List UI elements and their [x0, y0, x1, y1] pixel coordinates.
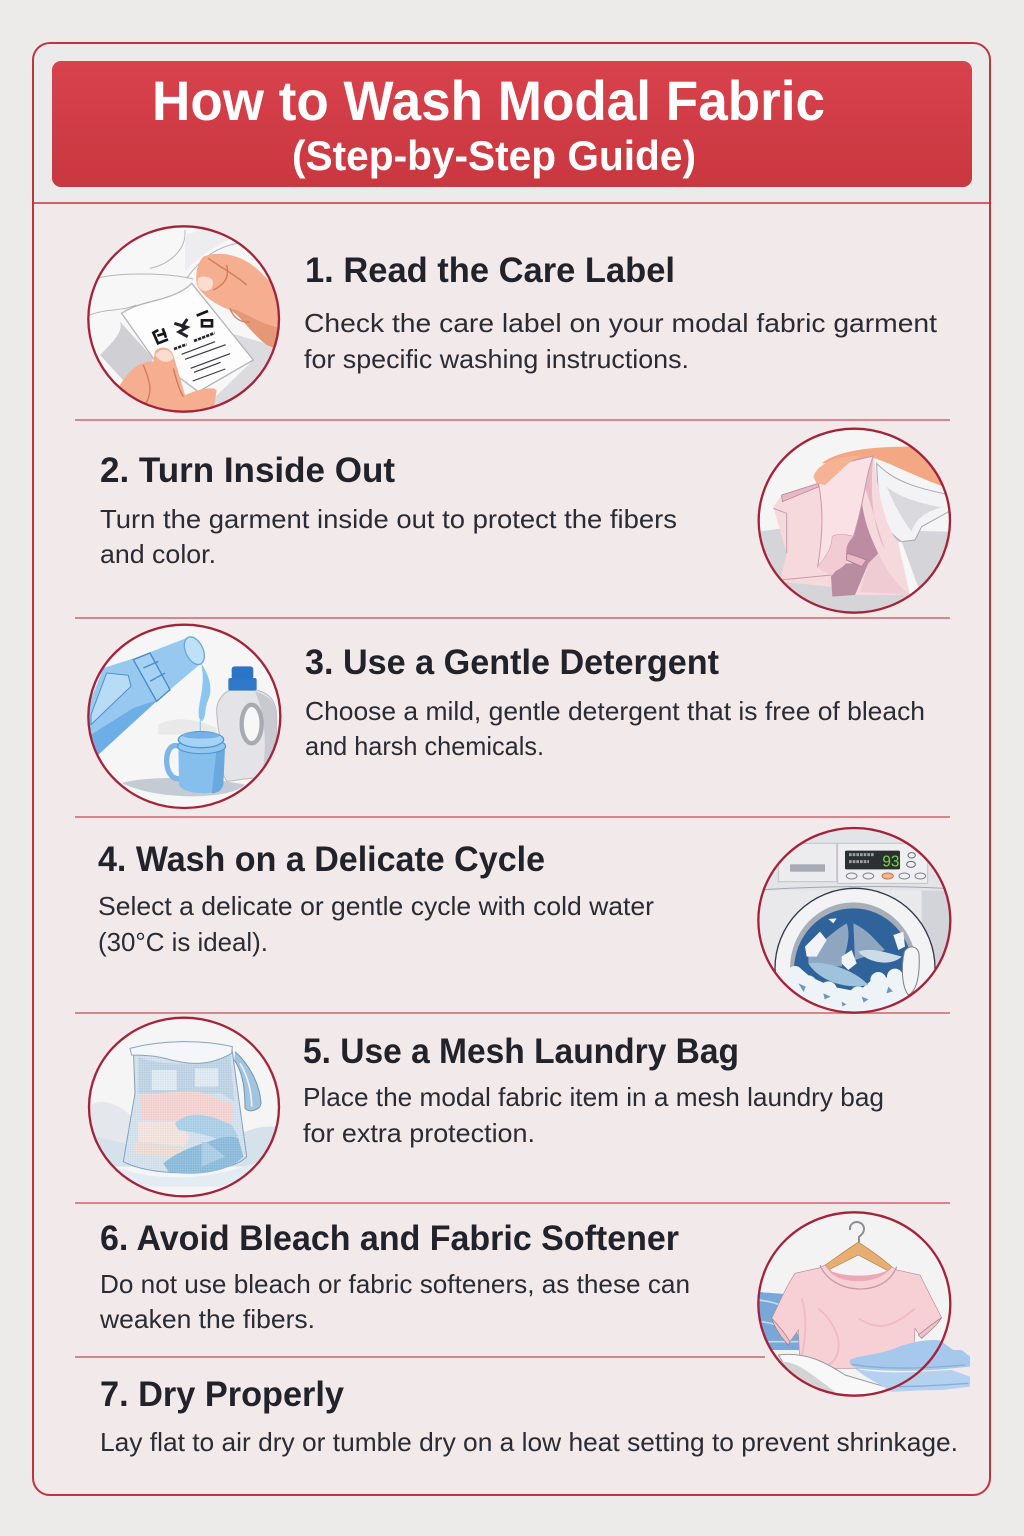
icon: washing machine with foam	[757, 826, 952, 1014]
subtitle: (Step-by-Step Guide)	[292, 132, 696, 179]
step 7 heading: 7. Dry Properly	[100, 1375, 345, 1414]
icon: pink garment turned inside out	[758, 429, 953, 617]
step 1 heading: 1. Read the Care Label	[305, 251, 675, 290]
step 3 text: and harsh chemicals.	[305, 731, 544, 761]
step 5 text: Place the modal fabric item in a mesh laundry bag	[303, 1082, 884, 1112]
step 7 text: Lay flat to air dry or tumble dry on a low heat setting to prevent shrinkage.	[100, 1427, 958, 1457]
step 2: turn inside out	[100, 429, 953, 617]
step 1 text: for specific washing instructions.	[304, 344, 689, 374]
icon: washing machine with foam: 93	[882, 854, 899, 871]
step 1: read the care label	[88, 226, 938, 415]
step 4 heading: 4. Wash on a Delicate Cycle	[98, 840, 545, 879]
title: How to Wash Modal Fabric	[152, 69, 825, 132]
step 6 heading: 6. Avoid Bleach and Fabric Softener	[100, 1219, 679, 1258]
step 4 text: (30°C is ideal).	[98, 927, 268, 957]
folded blue cloths	[850, 1340, 970, 1392]
step 3 text: Choose a mild, gentle detergent that is free of bleach	[305, 696, 925, 726]
step 6: avoid bleach and fabric softener	[99, 1212, 970, 1402]
step 2 text: and color.	[100, 539, 216, 569]
step 4: wash on a delicate cycle	[98, 826, 952, 1014]
icon: hands holding care label	[88, 226, 283, 415]
step 7: dry properly	[100, 1375, 958, 1457]
icon: mesh laundry bag	[88, 1018, 282, 1196]
step 5 heading: 5. Use a Mesh Laundry Bag	[303, 1032, 739, 1071]
step 1 text: Check the care label on your modal fabric garment	[304, 308, 938, 338]
step 3 heading: 3. Use a Gentle Detergent	[305, 643, 719, 682]
step 6 text: Do not use bleach or fabric softeners, as these can	[100, 1269, 690, 1299]
step 5 text: for extra protection.	[303, 1118, 535, 1148]
step 5: use a mesh laundry bag	[88, 1018, 884, 1196]
step 4 text: Select a delicate or gentle cycle with cold water	[98, 891, 654, 921]
step 6 text: weaken the fibers.	[99, 1304, 315, 1334]
step 2 text: Turn the garment inside out to protect the fibers	[100, 504, 677, 534]
step 3: use a gentle detergent	[85, 625, 925, 808]
icon: t-shirt on hanger with folded cloths	[757, 1212, 970, 1402]
icon: pouring detergent into cup	[85, 625, 280, 808]
step 2 heading: 2. Turn Inside Out	[100, 451, 395, 490]
title banner	[52, 61, 972, 187]
